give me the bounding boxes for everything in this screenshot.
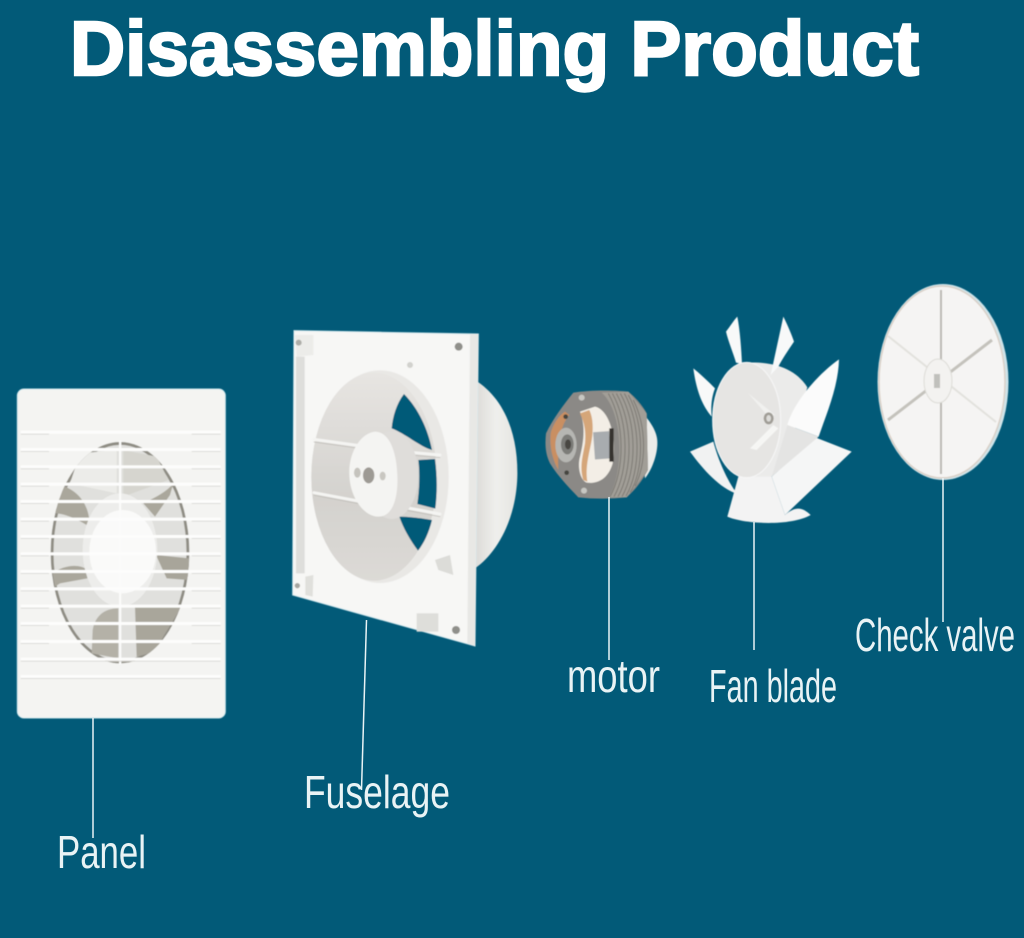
opening with fan xyxy=(50,442,190,665)
label and capacitor xyxy=(593,431,611,459)
vertical rib xyxy=(119,441,121,665)
title: Disassembling Product xyxy=(70,6,919,92)
rear duct xyxy=(475,380,517,568)
see-through gaps xyxy=(392,394,437,551)
bearing xyxy=(555,428,577,462)
hub cone xyxy=(713,362,781,478)
leader line: check valve xyxy=(942,478,944,622)
opening interior xyxy=(311,373,437,581)
louvres xyxy=(21,431,221,678)
ribs xyxy=(888,290,996,474)
leader line: fuselage xyxy=(362,620,366,790)
laminated stack xyxy=(602,392,648,497)
panel part: front grille xyxy=(17,389,225,718)
label: Panel: Panel xyxy=(57,826,146,878)
louvre shadows xyxy=(21,434,221,679)
leader line: motor xyxy=(608,497,610,660)
leader line: fan blade xyxy=(753,522,755,650)
label: Fan blade: Fan blade xyxy=(709,660,837,712)
back shell xyxy=(715,363,807,480)
blades xyxy=(690,317,852,523)
leader line: panel xyxy=(92,718,94,838)
struts xyxy=(314,439,440,517)
square frame xyxy=(293,331,478,646)
ring xyxy=(311,370,449,583)
label: motor: motor xyxy=(567,650,660,702)
screw holes xyxy=(455,343,463,351)
fan blade part xyxy=(690,317,852,523)
label: Fuselage: Fuselage xyxy=(304,766,450,818)
copper windings xyxy=(550,412,569,470)
fuselage part xyxy=(293,331,517,646)
motor part xyxy=(545,391,657,499)
motor mount xyxy=(365,431,418,519)
check valve part xyxy=(878,284,1008,480)
